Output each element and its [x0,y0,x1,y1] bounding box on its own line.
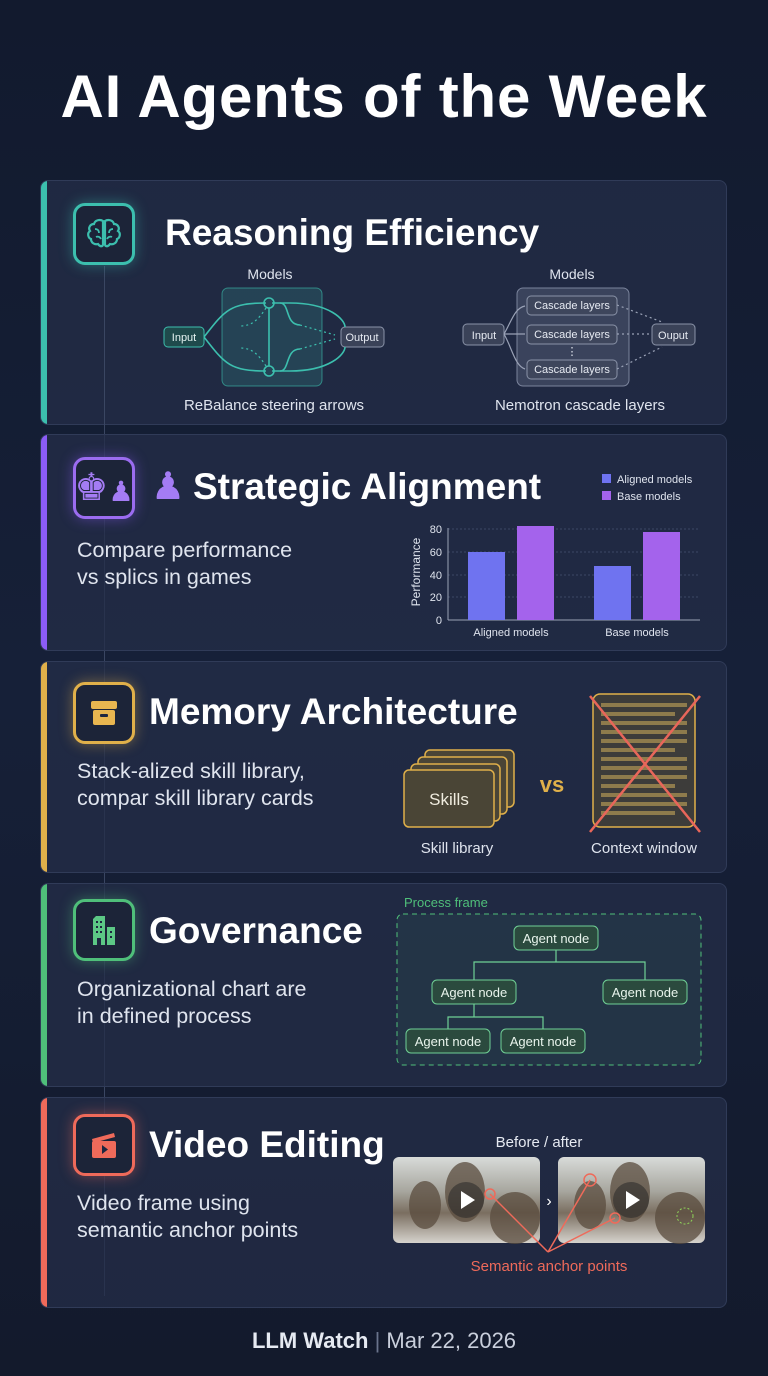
footer: LLM Watch | Mar 22, 2026 [252,1328,516,1353]
icon: building [73,899,135,961]
diagram: rebalance steering [164,266,696,414]
diagram: rebalance steering: Models [247,266,293,282]
diagram: rebalance steering: Nemotron cascade layers [495,397,665,414]
bar chart: Base models [617,491,681,503]
org chart in process frame: Agent node [510,1034,576,1049]
panel: video editing [40,1097,727,1308]
bar chart: Aligned models [617,474,693,486]
diagram: rebalance steering: ReBalance steering arrows [184,397,364,414]
text: strategic [77,538,292,589]
org chart in process frame: Agent node [523,931,589,946]
bar chart: 40 [430,570,442,582]
bar chart: 80 [430,524,442,536]
diagram: rebalance steering: Ouput [658,330,688,342]
diagram: rebalance steering: Output [345,332,379,344]
before/after frames: › [546,1193,552,1210]
icon: brain [73,203,135,265]
heading: memory architecture: Memory Architecture [149,691,518,732]
text: strategic: Compare performance [77,538,292,562]
diagram: rebalance steering: Models [549,266,595,282]
heading: video editing: Video Editing [149,1124,385,1165]
diagram: rebalance steering: Input [172,332,196,344]
org chart in process frame: Agent node [612,985,678,1000]
org chart in process frame: Process frame [404,895,488,910]
diagram: rebalance steering: Cascade layers [534,300,610,312]
heading: strategic alignment: Strategic Alignment [193,466,541,507]
org chart in process frame [396,895,702,1066]
bar chart [409,474,700,639]
diagram: rebalance steering: Cascade layers [534,364,610,376]
text: video: Video frame using [77,1191,250,1215]
diagram: rebalance steering: ⋮ [566,346,578,358]
text: governance [77,977,306,1028]
heading: reasoning efficiency: Reasoning Efficiency [165,212,539,253]
text: memory: Stack-alized skill library, [77,759,305,783]
text: video: semantic anchor points [77,1218,298,1242]
text: memory: compar skill library cards [77,786,314,810]
before/after frames: Before / after [496,1134,582,1151]
bar chart: 20 [430,592,442,604]
before/after frames [393,1134,705,1275]
panel: governance [40,883,727,1087]
text: strategic: vs splics in games [77,565,251,589]
bar chart: Performance [409,537,423,606]
icon: chess pieces [73,457,135,519]
bar chart: Base models [605,627,669,639]
bar chart: 0 [436,615,442,627]
diagram: rebalance steering: Input [472,330,496,342]
icon: chess pieces: ♟ [108,476,134,507]
panel: memory architecture [40,661,727,873]
skill library cards: vs [540,772,564,797]
org chart in process frame: Agent node [441,985,507,1000]
bar chart: 60 [430,547,442,559]
icon: pawn: ♟ [151,466,185,508]
org chart in process frame: Agent node [415,1034,481,1049]
skill library cards: Context window [591,840,697,857]
bar chart: Aligned models [473,627,549,639]
before/after frames: Semantic anchor points [471,1258,627,1275]
text: governance: in defined process [77,1004,252,1028]
text: memory [77,759,314,810]
panel: reasoning efficiency [40,180,727,425]
icon: clapperboard [73,1114,135,1176]
skill library cards: Skills [429,790,469,809]
skill library cards [403,693,701,857]
text: video [77,1191,298,1242]
diagram: rebalance steering: Cascade layers [534,329,610,341]
text: governance: Organizational chart are [77,977,306,1001]
title: AI Agents of the Week [61,63,707,130]
skill library cards: Skill library [421,840,494,857]
connector line [104,266,105,1296]
icon: archive box [73,682,135,744]
icon: chess pieces: ♚ [74,467,108,509]
panel: strategic alignment [40,434,727,651]
heading: governance: Governance [149,910,363,951]
